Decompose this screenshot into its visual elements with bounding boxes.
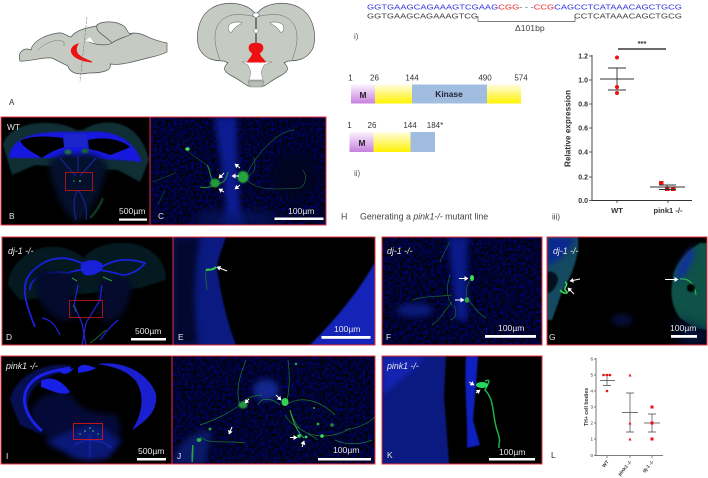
- deletion label: Δ101bp: [515, 23, 545, 33]
- B text and scale bar: 500µm: [119, 206, 145, 216]
- panel K: pink1 detail: [382, 356, 542, 464]
- truncated protein: 26: [368, 121, 377, 130]
- D text and scale bar: dj-1 -/-: [8, 246, 33, 256]
- significance bar: [618, 48, 666, 50]
- heading H: Generating a pink1-/- mutant line: [360, 212, 488, 222]
- pink1 points: [622, 374, 638, 440]
- full-length protein: Kinase: [435, 89, 463, 99]
- panel A: brain schematics: [9, 3, 315, 107]
- category labels: [611, 206, 683, 215]
- panel I-J frame: [1, 356, 375, 464]
- scatter chart L: TH+ cell bodies: 2: [590, 420, 593, 426]
- panel I: pink1 overview: [1, 356, 172, 464]
- coronal brain schematic: [197, 3, 315, 87]
- dj-1 points: [644, 406, 660, 440]
- G text and scale bar: 100µm: [670, 323, 696, 333]
- D text and scale bar: 500µm: [135, 326, 161, 336]
- inset box: [66, 172, 92, 190]
- E text and scale bar: 100µm: [334, 324, 360, 334]
- panel F: dj-1 detail: [382, 237, 542, 345]
- C text and scale bar: 100µm: [288, 206, 314, 216]
- scatter chart iii: relative expression: 1.2: [578, 54, 588, 60]
- truncated protein: M: [359, 138, 366, 148]
- inset box: [70, 300, 102, 318]
- full-length protein: 574: [514, 74, 528, 82]
- label L: L: [551, 450, 556, 460]
- B text and scale bar: B: [9, 211, 15, 221]
- full-length protein: 144: [405, 74, 419, 82]
- I text and scale bar: pink1 -/-: [5, 361, 38, 371]
- category labels: pink1 -/-: [617, 459, 634, 477]
- scatter chart iii: relative expression: 0.4: [578, 150, 588, 156]
- panel E: dj-1 detail: [173, 237, 375, 345]
- axes: [592, 55, 692, 200]
- label i: i): [354, 32, 359, 41]
- truncated protein: 144: [403, 121, 417, 130]
- K text and scale bar: pink1 -/-: [386, 361, 419, 371]
- scatter chart iii: relative expression: ***: [638, 39, 646, 48]
- I text and scale bar: I: [6, 451, 8, 461]
- G text and scale bar: [549, 246, 697, 342]
- panel G: dj-1 detail: [547, 237, 707, 345]
- category labels: WT: [611, 206, 623, 215]
- scatter chart L: TH+ cell bodies: 4: [590, 388, 593, 394]
- y axis title: Relative expression: [564, 90, 572, 167]
- K text and scale bar: K: [387, 450, 393, 460]
- C text and scale bar: [158, 206, 324, 221]
- F text and scale bar: F: [386, 332, 391, 342]
- G text and scale bar: dj-1 -/-: [553, 246, 578, 256]
- scatter chart L: TH+ cell bodies: 5: [590, 372, 593, 378]
- D text and scale bar: [6, 246, 166, 342]
- scatter chart iii: relative expression: 0.6: [578, 126, 588, 132]
- y axis title: TH+ cell bodies: [584, 388, 590, 426]
- full-length protein: M: [360, 90, 367, 100]
- I text and scale bar: 500µm: [138, 446, 164, 456]
- scatter chart iii: relative expression: [552, 39, 692, 222]
- panel D: dj-1 overview: [2, 237, 173, 345]
- label iii: iii): [552, 212, 560, 222]
- F text and scale bar: dj-1 -/-: [387, 246, 412, 256]
- scatter chart iii: relative expression: 0.0: [578, 198, 588, 205]
- label A: A: [9, 98, 15, 107]
- WT points: [600, 56, 634, 95]
- pink1 points: [650, 181, 685, 191]
- category labels: [601, 459, 656, 477]
- mutant sequence: GGTGAAGCAGAAAGTCG: [367, 12, 478, 20]
- deletion bracket: [478, 16, 575, 22]
- panel i: sequence alignment: [354, 2, 682, 41]
- category labels: dj-1 -/-: [642, 459, 656, 474]
- scatter chart L: TH+ cell bodies: 0: [590, 453, 593, 458]
- inset box: [74, 424, 102, 440]
- panel C: WT detail: [150, 117, 326, 225]
- sagittal brain schematic: [19, 17, 167, 82]
- truncated protein: 1: [347, 121, 352, 130]
- category labels: pink1 -/-: [653, 206, 683, 215]
- panel B: WT overview: [1, 117, 150, 225]
- scatter chart iii: relative expression: 0.2: [578, 174, 588, 182]
- J text and scale bar: [177, 445, 371, 461]
- truncated protein: [347, 121, 443, 152]
- K text and scale bar: 100µm: [499, 447, 525, 457]
- heading H: H: [341, 212, 347, 222]
- full-length protein: 1: [348, 74, 353, 82]
- axes: [596, 358, 663, 456]
- full-length protein: 26: [370, 74, 379, 82]
- scatter chart L: TH+ cell bodies: 3: [590, 404, 593, 410]
- scatter chart iii: relative expression: 1.0: [578, 78, 588, 84]
- D text and scale bar: D: [6, 332, 12, 342]
- panel D-E frame: [2, 237, 375, 345]
- label ii: ii): [354, 169, 361, 178]
- scatter chart L: TH+ cell bodies: 1: [590, 436, 593, 442]
- scatter chart L: TH+ cell bodies: [584, 356, 663, 477]
- mutant sequence: CCTCATAAACAGCTGCG: [574, 12, 682, 20]
- wild-type sequence: GGTGAAGCAGAAAGTCGAAG CGG - - - CCG CAGCCTCATAAACAGCTGCG: [367, 2, 682, 12]
- panel B-C frame: [1, 117, 326, 225]
- C text and scale bar: C: [158, 211, 164, 221]
- panel ii: domain diagrams: [347, 74, 528, 178]
- I text and scale bar: [5, 361, 166, 461]
- B text and scale bar: [7, 122, 147, 221]
- E text and scale bar: E: [178, 332, 184, 342]
- scatter chart L: TH+ cell bodies: 6: [590, 356, 593, 362]
- full-length protein: 490: [478, 74, 492, 82]
- truncated protein: 184*: [427, 121, 443, 130]
- full-length protein: [348, 74, 528, 104]
- F text and scale bar: 100µm: [498, 323, 524, 333]
- category labels: WT: [601, 459, 611, 469]
- WT points: [600, 374, 615, 392]
- J text and scale bar: 100µm: [333, 445, 359, 455]
- K text and scale bar: [386, 361, 535, 460]
- scatter chart iii: relative expression: 0.8: [578, 102, 588, 108]
- J text and scale bar: J: [177, 451, 181, 461]
- G text and scale bar: G: [549, 332, 556, 342]
- B text and scale bar: WT: [7, 122, 20, 132]
- panel J: pink1 detail: [172, 356, 375, 464]
- F text and scale bar: [386, 246, 536, 342]
- E text and scale bar: [178, 324, 370, 342]
